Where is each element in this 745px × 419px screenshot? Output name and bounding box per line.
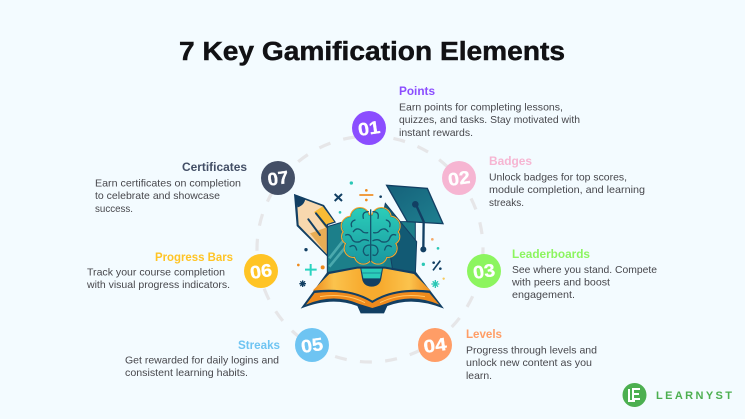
text: streaks description: Get rewarded for daily logins and <box>125 356 279 366</box>
panel: 02 badges <box>442 154 645 209</box>
text: points description: quizzes, and tasks. Stay motivated with <box>399 115 580 126</box>
heading: badges: Badges <box>489 154 532 168</box>
icon: learnyst mark <box>622 383 646 407</box>
heading: streaks: Streaks <box>238 338 280 352</box>
panel: 05 streaks <box>125 328 329 379</box>
text: levels description: unlock new content as you <box>466 358 592 369</box>
wordmark: LEARNYST <box>656 390 732 402</box>
text: certificates description: success. <box>95 204 133 215</box>
badge 07 <box>261 161 295 195</box>
badge 04: 04 <box>422 334 448 357</box>
text: certificates description: to celebrate and showcase <box>95 191 220 202</box>
heading: progress bars: Progress Bars <box>155 250 233 264</box>
text: certificates description <box>95 178 241 215</box>
title: 7 Key Gamification Elements <box>179 38 565 66</box>
text: certificates description: Earn certificates on completion <box>95 178 241 190</box>
badge 04 <box>418 328 452 362</box>
text: leaderboards description: engagement. <box>512 290 575 301</box>
icons: floating math symbols and dots <box>297 181 445 288</box>
badge 07: 07 <box>266 167 290 190</box>
heading: leaderboards: Leaderboards <box>512 247 590 261</box>
text: points description <box>399 102 580 139</box>
text: points description: instant rewards. <box>399 128 473 139</box>
text: levels description: Progress through levels and <box>466 346 597 356</box>
panel: 03 leaderboards <box>467 247 657 301</box>
text: badges description <box>489 172 645 209</box>
text: badges description: Unlock badges for top scores, <box>489 172 627 184</box>
badge 01 <box>352 111 386 145</box>
text: leaderboards description: See where you stand. Compete <box>512 265 657 276</box>
text: progress bars description: with visual progress indicators. <box>86 280 230 291</box>
text: levels description: learn. <box>466 371 492 382</box>
text: levels description <box>466 346 597 382</box>
badge 05: 05 <box>300 334 324 357</box>
panel: 06 progress bars <box>86 250 278 291</box>
heading: certificates: Certificates <box>182 160 247 174</box>
panel: 01 points <box>352 84 580 145</box>
icon: graduation cap <box>383 185 443 274</box>
heading: points: Points <box>399 84 435 98</box>
text: progress bars description: Track your course completion <box>87 268 225 278</box>
text: leaderboards description: with peers and boost <box>511 278 610 288</box>
badge 05 <box>295 328 329 362</box>
text: streaks description: consistent learning habits. <box>125 368 248 379</box>
icon: open book <box>301 267 444 313</box>
heading: levels: Levels <box>466 327 502 341</box>
panel: 04 levels <box>418 327 597 382</box>
text: badges description: module completion, and learning <box>489 185 645 196</box>
badge 03 <box>467 254 501 288</box>
central illustration: brain bulb, book, pencil and cap <box>294 181 445 313</box>
text: badges description: streaks. <box>489 198 524 209</box>
text: points description: Earn points for completing lessons, <box>399 102 563 114</box>
text: streaks description <box>125 356 279 379</box>
badge 02: 02 <box>447 167 471 190</box>
logo: learnyst <box>622 383 732 407</box>
icon: pencil <box>294 194 336 257</box>
text: progress bars description <box>86 268 230 291</box>
badge 02 <box>442 161 476 195</box>
text: leaderboards description <box>511 265 657 301</box>
icon: lightbulb brain <box>342 208 399 270</box>
icon: teal board behind brain <box>327 222 415 274</box>
badge 03: 03 <box>472 260 496 283</box>
badge 06: 06 <box>249 260 273 283</box>
panel: 07 certificates <box>95 160 295 215</box>
badge 06 <box>244 254 278 288</box>
badge 01: 01 <box>357 117 381 140</box>
